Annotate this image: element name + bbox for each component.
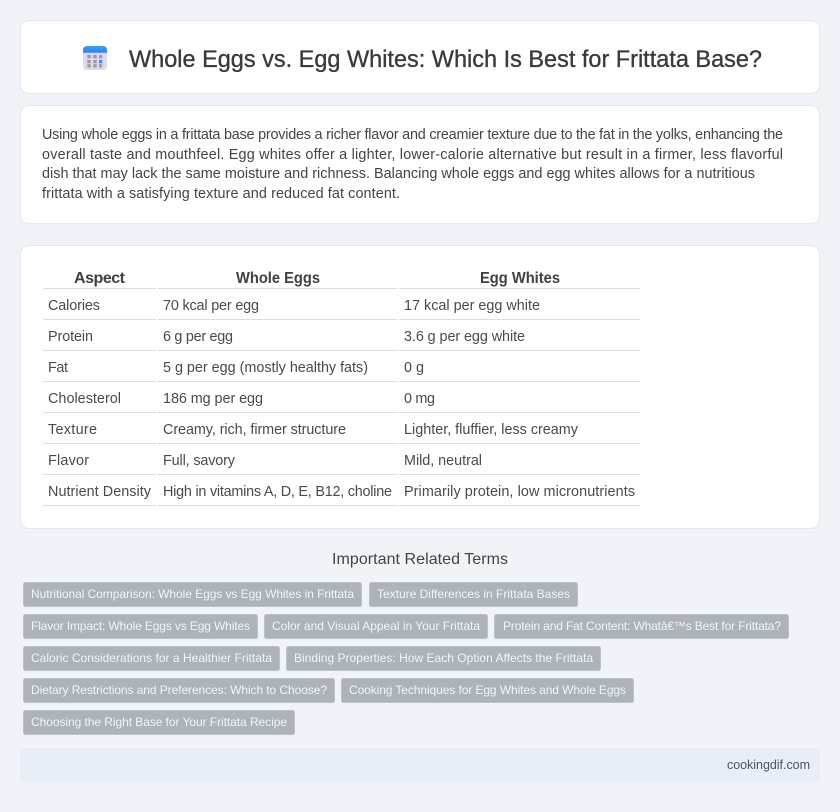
- panel: description: [20, 106, 820, 224]
- row: texture: Creamy, rich, firmer structure: [163, 422, 346, 438]
- tag: [24, 646, 280, 670]
- row: protein: Protein: [48, 329, 93, 345]
- row: cholesterol: 186 mg per egg: [163, 391, 263, 407]
- table header: [74, 270, 560, 287]
- related term tags: [24, 582, 788, 734]
- tag: Cooking Techniques for Egg Whites and Whole Eggs: [349, 683, 626, 697]
- row: protein: [48, 329, 525, 345]
- tag: [370, 582, 578, 606]
- tag: [286, 646, 600, 670]
- tag: [264, 614, 488, 638]
- row: calories: [48, 298, 540, 314]
- tag: [342, 678, 634, 702]
- row: flavor: [48, 453, 482, 469]
- text block: description: [42, 127, 783, 202]
- heading: related terms: Important Related Terms: [332, 551, 508, 568]
- row: fat: 0 g: [404, 360, 424, 376]
- tag: Dietary Restrictions and Preferences: Which to Choose?: [31, 683, 327, 697]
- tag: Binding Properties: How Each Option Affects the Frittata: [294, 651, 593, 665]
- row: protein: 3.6 g per egg white: [404, 329, 525, 345]
- row: nutrient density: [48, 484, 635, 500]
- icon: calendar: [83, 46, 107, 70]
- row: flavor: Flavor: [48, 453, 89, 469]
- text block: description: dish that may lack the same moisture and richness. Balancing whole eggs and egg whites allows for a nutritious: [42, 166, 755, 182]
- table header: Aspect: [74, 270, 126, 287]
- footer: [20, 748, 820, 782]
- tag: Caloric Considerations for a Healthier Frittata: [31, 651, 272, 665]
- row: cholesterol: Cholesterol: [48, 391, 121, 407]
- tag: [24, 582, 362, 606]
- text block: description: Using whole eggs in a frittata base provides a richer flavor and creamier texture due to the fat in the yolks, enhancing the: [42, 127, 783, 143]
- row: nutrient density: High in vitamins A, D, E, B12, choline: [163, 484, 392, 500]
- tag: Color and Visual Appeal in Your Frittata: [272, 619, 480, 633]
- tag: [24, 614, 258, 638]
- table header: Whole Eggs: [236, 270, 320, 287]
- row: flavor: Full, savory: [163, 453, 236, 469]
- row: fat: [48, 360, 424, 376]
- panel: comparison table: [20, 246, 820, 528]
- row: calories: 70 kcal per egg: [163, 298, 259, 314]
- row: texture: Lighter, fluffier, less creamy: [404, 422, 579, 438]
- footer source text: cookingdif.com: [727, 758, 810, 772]
- row: protein: 6 g per egg: [163, 329, 233, 345]
- tag: Nutritional Comparison: Whole Eggs vs Egg Whites in Frittata: [31, 587, 354, 601]
- tag: [24, 678, 334, 702]
- row: nutrient density: Nutrient Density: [48, 484, 152, 500]
- row: flavor: Mild, neutral: [404, 453, 482, 469]
- tag: Flavor Impact: Whole Eggs vs Egg Whites: [31, 619, 250, 633]
- row: nutrient density: Primarily protein, low micronutrients: [404, 484, 635, 500]
- row: cholesterol: 0 mg: [404, 391, 435, 407]
- row: texture: [48, 422, 579, 438]
- panel: header: [20, 20, 820, 94]
- row: calories: Calories: [48, 298, 100, 314]
- tag: Choosing the Right Base for Your Frittata Recipe: [31, 715, 287, 729]
- tag: Protein and Fat Content: Whatâ€™s Best for Frittata?: [503, 619, 781, 633]
- tag: [494, 614, 788, 638]
- text block: description: overall taste and mouthfeel. Egg whites offer a lighter, lower-calorie alternative but result in a firmer, less flavorful: [42, 147, 783, 163]
- row: cholesterol: [48, 391, 435, 407]
- row: fat: 5 g per egg (mostly healthy fats): [163, 360, 368, 376]
- title: Whole Eggs vs. Egg Whites: Which Is Best for Frittata Base?: [129, 46, 762, 73]
- table header: Egg Whites: [480, 270, 560, 287]
- row: texture: Texture: [48, 422, 97, 438]
- row: fat: Fat: [48, 360, 68, 376]
- tag: [24, 710, 294, 734]
- row: calories: 17 kcal per egg white: [404, 298, 540, 314]
- tag: Texture Differences in Frittata Bases: [377, 587, 570, 601]
- text block: description: frittata with a satisfying texture and reduced fat content.: [42, 186, 400, 202]
